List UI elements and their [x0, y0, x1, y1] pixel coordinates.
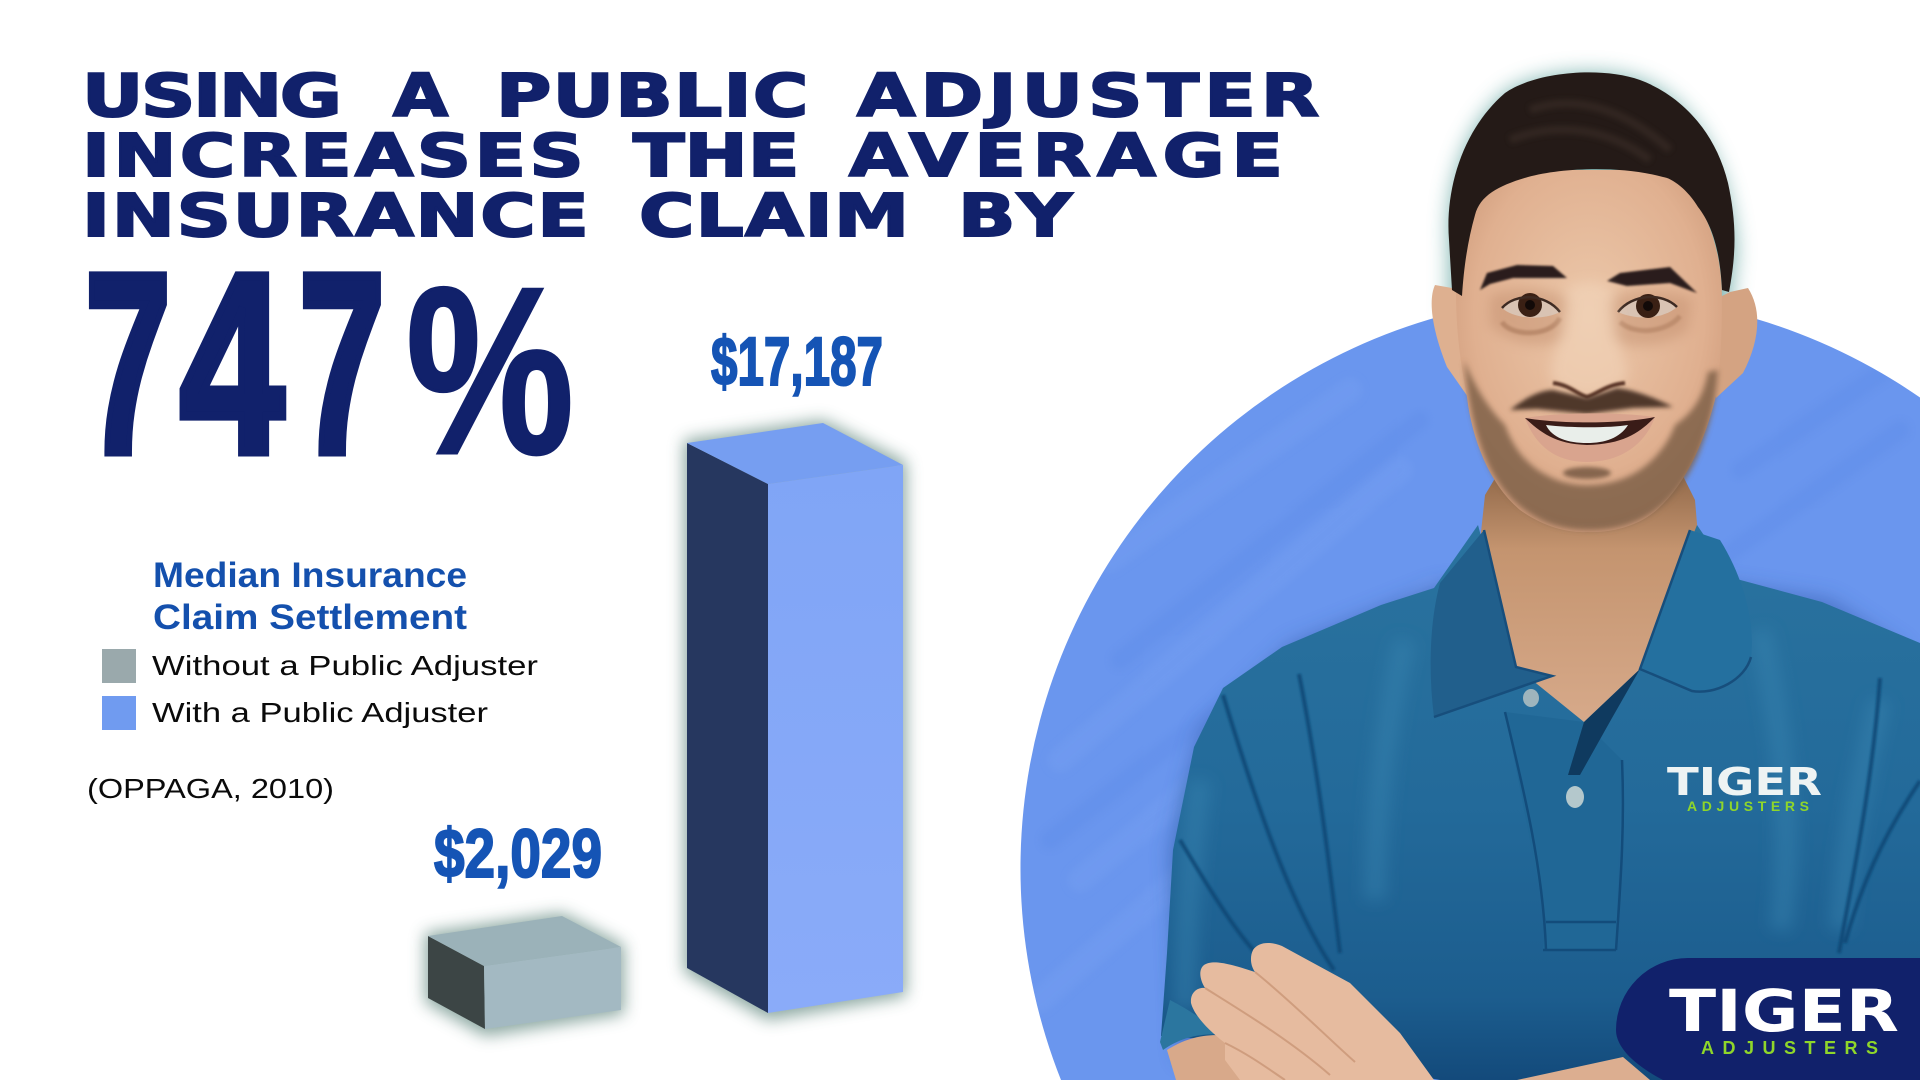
big statistic: 747%: 4: [180, 221, 284, 507]
heading: title: [82, 61, 1319, 250]
placket button: [1566, 786, 1584, 808]
shirt logo: [1667, 760, 1822, 814]
legend item: without a public adjuster: Without a Public Adjuster: [152, 650, 538, 681]
crossed arm and hand: [1160, 943, 1650, 1080]
right eyebrow: [1607, 267, 1697, 293]
left eye: [1502, 293, 1560, 333]
legend item: without a public adjuster: [102, 649, 538, 683]
face: [1456, 170, 1722, 532]
shoulder shadow: [1170, 585, 1905, 1060]
smile: [1525, 413, 1655, 479]
legend: [102, 556, 538, 730]
photo: smiling man in a blue polo: [1160, 72, 1920, 1080]
shirt highlights: [1185, 630, 1880, 1010]
heading: title: A: [393, 61, 449, 130]
value label: $17,187: $17,187: [711, 323, 883, 400]
source citation: (OPPAGA, 2010): [87, 773, 334, 804]
heading: title: CLAIM: [639, 181, 909, 250]
collar left: [1431, 530, 1552, 717]
placket: [1505, 712, 1622, 950]
heading: title: INSURANCE: [82, 181, 589, 250]
neck: [1478, 470, 1700, 735]
heading: title: USING: [82, 61, 342, 130]
logo badge: [1616, 958, 1920, 1080]
nose: [1550, 282, 1628, 397]
head glow: [1448, 72, 1736, 320]
heading: title: BY: [958, 181, 1073, 250]
big statistic: 747%: 7: [299, 221, 385, 507]
shirt logo: ADJUSTERS: [1687, 798, 1809, 814]
logo badge: TIGER: [1669, 977, 1899, 1045]
heading: title: PUBLIC: [496, 61, 808, 130]
bar: with a public adjuster: [684, 420, 906, 1020]
shirt folds: [1180, 674, 1920, 970]
heading: title: THE: [633, 121, 799, 190]
hair: [1448, 72, 1735, 296]
value label: $2,029: $2,029: [434, 815, 602, 892]
ears: [1432, 285, 1757, 398]
left eyebrow: [1480, 265, 1567, 290]
big statistic: 747%: %: [406, 239, 574, 504]
shirt logo: TIGER: [1667, 760, 1822, 804]
big statistic: 747%: [85, 221, 574, 507]
beard: [1464, 360, 1718, 530]
logo badge: ADJUSTERS: [1701, 1038, 1878, 1058]
collar button: [1523, 689, 1539, 707]
placket opening shadow: [1568, 669, 1640, 775]
polo shirt: [1161, 525, 1920, 1080]
collar right: [1640, 530, 1752, 692]
legend item: with a public adjuster: With a Public Adjuster: [152, 697, 488, 728]
big statistic: 747%: 7: [85, 221, 171, 507]
bar: without a public adjuster: [425, 913, 624, 1036]
legend title: [153, 556, 467, 637]
panel: blue circle background: [1020, 295, 1920, 1080]
heading: title: INCREASES: [82, 121, 584, 190]
legend item: with a public adjuster: [102, 696, 488, 730]
legend title: Claim Settlement: [153, 598, 467, 637]
legend title: Median Insurance: [153, 556, 467, 595]
face shading: [1490, 289, 1692, 346]
heading: title: AVERAGE: [849, 121, 1283, 190]
right eye: [1618, 294, 1680, 331]
mustache: [1510, 388, 1673, 414]
heading: title: ADJUSTER: [857, 61, 1319, 130]
